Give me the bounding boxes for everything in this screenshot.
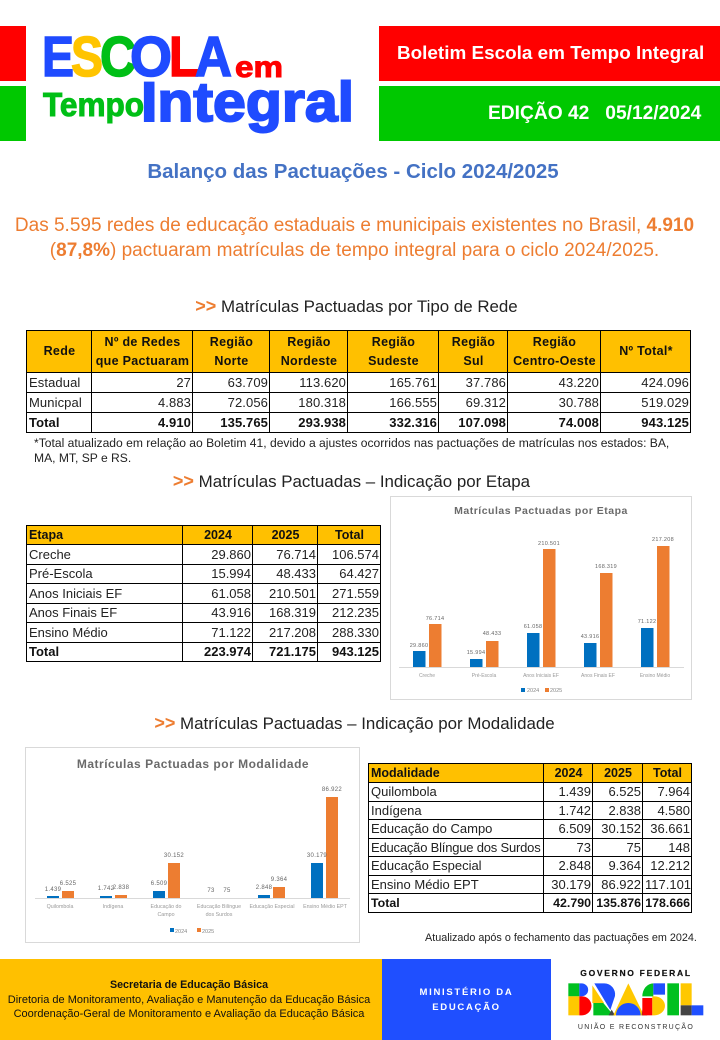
footer: ministério: MINISTÉRIO DA (420, 987, 513, 998)
table: tipo de rede: Nordeste (281, 354, 337, 368)
heading: etapa: >> Matrículas Pactuadas – Indicação por Etapa (173, 471, 530, 491)
table: modalidade: 73 (577, 840, 591, 855)
table: tipo de rede: 74.008 (559, 415, 599, 430)
table: etapa: 61.058 (211, 586, 251, 601)
table: etapa: 212.235 (332, 605, 379, 620)
table: tipo de rede: 424.096 (641, 375, 689, 390)
chart: matrículas por etapa: Pré-Escola (472, 673, 496, 679)
header bar: green left (0, 86, 26, 141)
intro text: (87,8%) pactuaram matrículas de tempo integral para o ciclo 2024/2025. (50, 240, 659, 261)
table: modalidade: Modalidade (371, 766, 440, 780)
banner: edição: EDIÇÃO 42 05/12/2024 (488, 103, 701, 124)
table: modalidade: Ensino Médio EPT (371, 877, 479, 892)
table: modalidade: Educação Especial (371, 858, 482, 873)
chart: matrículas por modalidade: 6.525 (60, 881, 77, 887)
chart: matrículas por modalidade (25, 747, 360, 943)
chart: matrículas por etapa: 210.501 (538, 541, 560, 547)
table: modalidade: 117.101 (645, 877, 691, 892)
table: modalidade: Total (371, 896, 400, 910)
table: tipo de rede: 27 (176, 375, 191, 390)
intro text (15, 215, 694, 261)
table: modalidade (368, 763, 692, 913)
table: modalidade: 148 (668, 840, 690, 855)
table: etapa: 48.433 (276, 566, 316, 581)
table: tipo de rede: 4.910 (158, 415, 191, 430)
footnote (34, 436, 669, 464)
table: modalidade: 36.661 (650, 821, 690, 836)
table: modalidade: 6.509 (558, 821, 591, 836)
table: etapa: 271.559 (332, 586, 379, 601)
table: modalidade: 7.964 (657, 784, 690, 799)
chart: matrículas por etapa: Matrículas Pactuadas por Etapa (454, 505, 628, 517)
table: tipo de rede: que Pactuaram (96, 354, 189, 368)
table: tipo de rede: Sudeste (368, 354, 419, 368)
table: etapa: 217.208 (269, 625, 316, 640)
logo: Escola em Tempo Integral: em (235, 51, 283, 84)
logo: governo federal brasil (568, 968, 704, 1031)
table: tipo de rede (26, 330, 691, 433)
table: etapa: 168.319 (269, 605, 316, 620)
footer: ministério: EDUCAÇÃO (432, 1002, 501, 1013)
table: etapa: 64.427 (339, 566, 379, 581)
chart: matrículas por modalidade: 73 (207, 888, 215, 894)
table: tipo de rede: 43.220 (559, 375, 599, 390)
chart: matrículas por modalidade: Educação Bilíngue (197, 904, 241, 910)
table: tipo de rede: 69.312 (466, 395, 506, 410)
chart: matrículas por etapa: 48.433 (483, 631, 501, 637)
table: modalidade: 1.742 (558, 803, 591, 818)
chart: matrículas por etapa: Ensino Médio (640, 673, 670, 679)
footer: ministério (382, 959, 551, 1040)
chart: matrículas por modalidade: 1.742 (98, 886, 115, 892)
chart: matrículas por modalidade: Quilombola (47, 904, 73, 910)
footer: secretaria (0, 959, 382, 1040)
table: tipo de rede: 180.318 (298, 395, 346, 410)
table: etapa: Ensino Médio (29, 625, 108, 640)
table: etapa: 288.330 (332, 625, 379, 640)
header bar: red left (0, 26, 26, 81)
banner: boletim: Boletim Escola em Tempo Integral (397, 43, 704, 64)
table: tipo de rede: Norte (214, 354, 249, 368)
chart: matrículas por modalidade: Educação do (151, 904, 182, 910)
footer: secretaria: Secretaria de Educação Básica (110, 979, 268, 991)
chart: matrículas por modalidade: 2.838 (113, 885, 130, 891)
chart: matrículas por modalidade: Educação Especial (249, 904, 295, 910)
table: etapa: 76.714 (276, 547, 316, 562)
table: modalidade: 1.439 (558, 784, 591, 799)
table: etapa (26, 525, 381, 662)
table: tipo de rede: Região (372, 334, 415, 348)
chart: matrículas por etapa: Anos Finais EF (581, 673, 615, 679)
chart: matrículas por modalidade: dos Surdos (206, 912, 233, 918)
table: modalidade: 86.922 (601, 877, 641, 892)
table: tipo de rede: 293.938 (298, 415, 346, 430)
table: etapa: 2025 (272, 528, 299, 542)
table: etapa: 2024 (204, 528, 232, 542)
table: modalidade: 9.364 (608, 858, 641, 873)
chart: matrículas por modalidade: 75 (223, 888, 231, 894)
table: tipo de rede: Municpal (29, 395, 82, 410)
update note: Atualizado após o fechamento das pactuações em 2024. (425, 932, 697, 944)
table: modalidade: 30.179 (551, 877, 591, 892)
chart: matrículas por etapa: Anos Iniciais EF (523, 673, 559, 679)
table: tipo de rede: Nº Total* (619, 344, 673, 358)
table: etapa: 29.860 (211, 547, 251, 562)
table: etapa: Anos Finais EF (29, 605, 117, 620)
logo: Escola em Tempo Integral (42, 30, 354, 134)
table: etapa: 223.974 (204, 644, 251, 659)
table: etapa: 106.574 (332, 547, 379, 562)
table: etapa: 15.994 (211, 566, 251, 581)
table: tipo de rede: Região (210, 334, 253, 348)
chart: matrículas por modalidade: 2025 (202, 929, 214, 935)
chart: matrículas por modalidade: 30.179 (307, 853, 327, 859)
table: modalidade: 12.212 (650, 858, 690, 873)
table: modalidade: 42.790 (553, 896, 591, 910)
chart: matrículas por modalidade: Matrículas Pactuadas por Modalidade (77, 757, 309, 771)
table: tipo de rede: Nº de Redes (105, 334, 180, 348)
heading: modalidade: >> Matrículas Pactuadas – Indicação por Modalidade (154, 713, 555, 733)
chart: matrículas por modalidade: Campo (157, 912, 175, 918)
banner: edição (379, 86, 720, 141)
footnote: *Total atualizado em relação ao Boletim 41, devido a ajustes ocorridos nas pactuações de matrículas nos estados: BA, (34, 436, 669, 450)
chart: matrículas por etapa: 61.058 (524, 624, 542, 630)
intro text: Das 5.595 redes de educação estaduais e municipais existentes no Brasil, 4.910 (15, 215, 694, 236)
table: etapa: 721.175 (269, 644, 316, 659)
table: tipo de rede: Região (287, 334, 331, 348)
table: modalidade: 75 (627, 840, 641, 855)
chart: matrículas por etapa: 168.319 (595, 564, 617, 570)
table: etapa: 210.501 (269, 586, 316, 601)
chart: matrículas por etapa: 71.122 (638, 619, 656, 625)
table: tipo de rede: 72.056 (228, 395, 268, 410)
table: tipo de rede: 63.709 (228, 375, 268, 390)
table: tipo de rede: Estadual (29, 375, 80, 390)
table: tipo de rede: Região (452, 334, 495, 348)
table: tipo de rede: 166.555 (389, 395, 437, 410)
table: modalidade: Quilombola (371, 784, 437, 799)
table: modalidade: 2024 (555, 766, 582, 780)
footer: secretaria: Diretoria de Monitoramento, Avaliação e Manutenção da Educação Básica (8, 994, 370, 1006)
table: modalidade: 2.848 (558, 858, 591, 873)
table: modalidade: 4.580 (657, 803, 690, 818)
chart: matrículas por etapa (390, 496, 692, 700)
table: modalidade: 135.876 (596, 896, 641, 910)
table: etapa: 43.916 (211, 605, 251, 620)
table: tipo de rede: 943.125 (641, 415, 689, 430)
table: tipo de rede: Região (533, 334, 576, 348)
table: etapa: Pré-Escola (29, 566, 93, 581)
chart: matrículas por modalidade: 86.922 (322, 787, 342, 793)
heading: tipo de rede: >> Matrículas Pactuadas por Tipo de Rede (195, 296, 518, 316)
table: etapa: Creche (29, 547, 71, 562)
table: modalidade: 2025 (604, 766, 632, 780)
table: modalidade: Educação Blíngue dos Surdos (371, 840, 540, 855)
table: tipo de rede: Sul (463, 354, 484, 368)
table: etapa: 943.125 (332, 644, 379, 659)
chart: matrículas por modalidade: 2024 (175, 929, 187, 935)
footer: secretaria: Coordenação-Geral de Monitoramento e Avaliação da Educação Básica (14, 1008, 364, 1020)
table: tipo de rede: 37.786 (466, 375, 506, 390)
table: tipo de rede: 4.883 (158, 395, 191, 410)
title: Balanço das Pactuações - Ciclo 2024/2025 (147, 160, 559, 183)
chart: matrículas por modalidade: Ensino Médio EPT (303, 904, 348, 910)
chart: matrículas por modalidade: 9.364 (271, 877, 288, 883)
table: modalidade: Educação do Campo (371, 821, 492, 836)
table: modalidade: 178.666 (645, 896, 690, 910)
table: tipo de rede: 30.788 (559, 395, 599, 410)
table: etapa: Anos Iniciais EF (29, 586, 122, 601)
chart: matrículas por modalidade: 2.848 (256, 885, 273, 891)
table: modalidade: Total (653, 766, 682, 780)
chart: matrículas por etapa: 15.994 (467, 650, 485, 656)
table: etapa: Total (29, 644, 59, 659)
chart: matrículas por etapa: 43.916 (581, 634, 599, 640)
table: tipo de rede: Centro-Oeste (513, 354, 596, 368)
chart: matrículas por modalidade: 6.509 (151, 881, 168, 887)
chart: matrículas por etapa: 2025 (550, 688, 562, 694)
table: tipo de rede: 332.316 (389, 415, 437, 430)
chart: matrículas por etapa: 217.208 (652, 537, 674, 543)
chart: matrículas por modalidade: 1.439 (45, 887, 62, 893)
chart: matrículas por etapa: Creche (419, 673, 435, 679)
chart: matrículas por etapa: 29.860 (410, 643, 428, 649)
table: etapa: 71.122 (211, 625, 251, 640)
table: tipo de rede: 135.765 (220, 415, 268, 430)
table: tipo de rede: 107.098 (458, 415, 506, 430)
chart: matrículas por modalidade: Indígena (103, 904, 123, 910)
logo: Escola em Tempo Integral: Integral (141, 70, 354, 133)
table: tipo de rede: Rede (44, 344, 75, 358)
table: tipo de rede: 113.620 (299, 375, 346, 390)
table: tipo de rede: Total (29, 415, 60, 430)
logo: governo federal brasil: UNIÃO E RECONSTRUÇÃO (578, 1022, 694, 1031)
chart: matrículas por etapa: 2024 (527, 688, 539, 694)
table: etapa: Total (335, 528, 364, 542)
table: modalidade: 30.152 (601, 821, 641, 836)
table: etapa: Etapa (29, 528, 63, 542)
chart: matrículas por modalidade: 30.152 (164, 853, 184, 859)
logo: governo federal brasil: GOVERNO FEDERAL (580, 968, 692, 978)
table: tipo de rede: 519.029 (641, 395, 689, 410)
table: modalidade: 6.525 (608, 784, 641, 799)
table: modalidade: Indígena (371, 803, 422, 818)
chart: matrículas por etapa: 76.714 (426, 616, 444, 622)
logo: Escola em Tempo Integral: Tempo (43, 86, 144, 123)
banner: boletim (379, 26, 720, 81)
table: modalidade: 2.838 (608, 803, 641, 818)
footnote: MA, MT, SP e RS. (34, 450, 131, 464)
table: tipo de rede: 165.761 (389, 375, 437, 390)
